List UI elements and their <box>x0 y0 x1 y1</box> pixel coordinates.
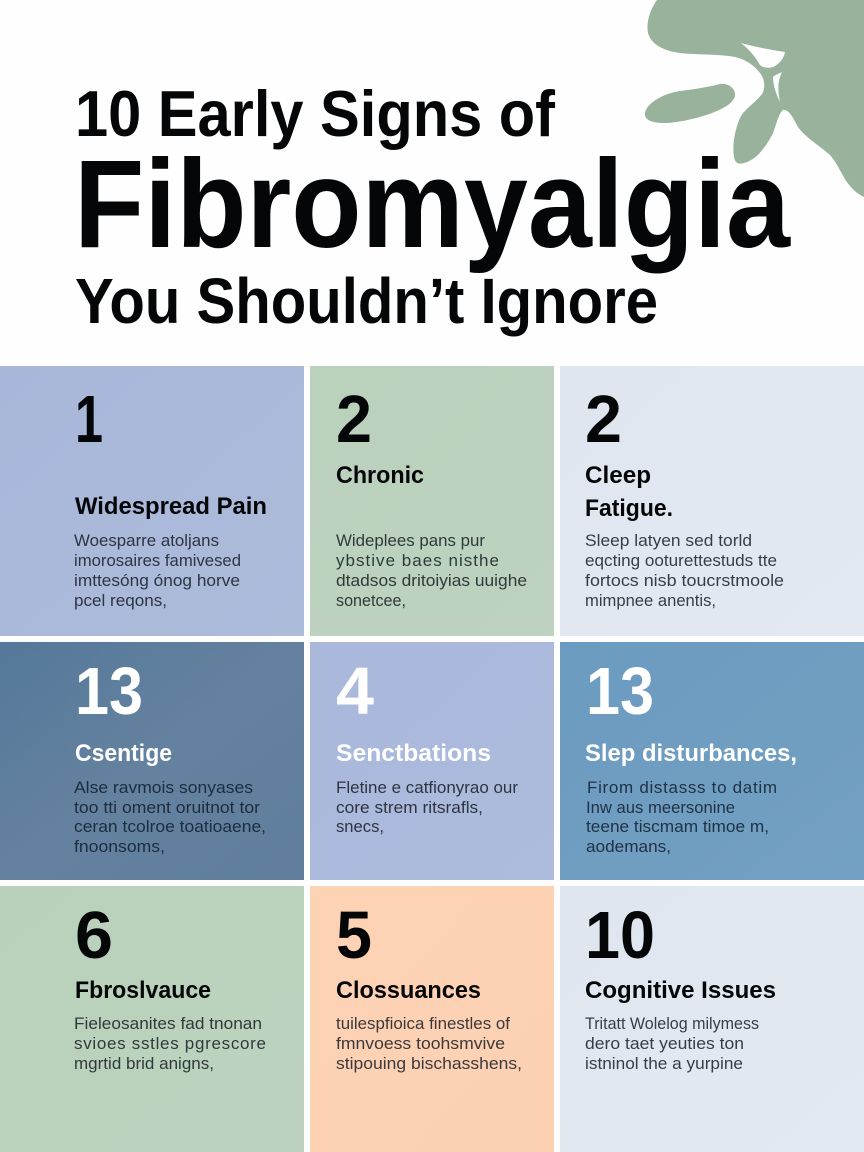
body text: snecs, <box>336 817 384 836</box>
body text <box>585 1014 759 1073</box>
number: 2 <box>585 382 622 457</box>
body text: sonetcee, <box>336 591 406 610</box>
heading: Senctbations <box>336 740 491 767</box>
number: 1 <box>75 382 103 457</box>
body text: Fieleosanites fad tnonan <box>74 1014 262 1033</box>
body text: eqcting ooturettestuds tte <box>585 551 777 570</box>
panel: 13 Slep disturbances <box>560 642 864 880</box>
body text: dtadsos dritoiyias uuighe <box>336 571 527 590</box>
heading: Csentige <box>75 740 172 767</box>
body text: istninol the a yurpine <box>585 1054 743 1073</box>
body text: imorosaires famivesed <box>74 551 241 570</box>
body text: dero taet yeuties ton <box>585 1034 744 1053</box>
body text <box>74 531 241 610</box>
heading <box>585 462 673 522</box>
body text: mgrtid brid anigns, <box>74 1054 214 1073</box>
heading: Widespread Pain <box>75 493 267 520</box>
panel: 10 Cognitive Issues <box>560 886 864 1152</box>
body text: Woesparre atoljans <box>74 531 219 550</box>
number: 4 <box>336 654 374 729</box>
number: 13 <box>586 654 654 729</box>
body text <box>336 778 518 836</box>
body text: aodemans, <box>586 837 671 856</box>
body text: fortocs nisb toucrstmoole <box>585 571 784 590</box>
heading: Chronic <box>336 462 424 489</box>
number: 5 <box>336 898 372 973</box>
number: 6 <box>75 898 113 973</box>
body text: Alse ravmois sonyases <box>74 778 253 797</box>
heading: Fbroslvauce <box>75 977 211 1004</box>
body text: Sleep latyen sed torld <box>585 531 752 550</box>
body text <box>74 1014 266 1073</box>
panel: 1 Widespread Pain <box>0 366 304 636</box>
body text: Fletine e catfionyrao our <box>336 778 518 797</box>
number: 10 <box>585 898 655 973</box>
body text: svioes sstles pgrescore <box>74 1034 266 1053</box>
body text: teene tiscmam timoe m, <box>586 817 769 836</box>
panel: 2 Chronic <box>310 366 554 636</box>
panel: 4 Senctbations <box>310 642 554 880</box>
panel: 13 Csentige <box>0 642 304 880</box>
body text: Tritatt Wolelog milymess <box>585 1014 759 1033</box>
panel: 6 Fbroslvauce <box>0 886 304 1152</box>
body text: pcel reqons, <box>74 591 167 610</box>
heading: Slep disturbances, <box>585 740 797 767</box>
body text: fmnvoess toohsmvive <box>336 1034 505 1053</box>
heading: Cleep <box>585 462 651 489</box>
body text: imttesóng ónog horve <box>74 571 240 590</box>
body text: Wideplees pans pur <box>336 531 485 550</box>
body text: Firom distasss to datim <box>587 778 777 797</box>
body text <box>586 778 777 856</box>
title line 3: You Shouldn’t Ignore <box>75 265 658 337</box>
body text: Inw aus meersonine <box>586 798 735 817</box>
body text: ceran tcolroe toatioaene, <box>74 817 266 836</box>
number: 2 <box>336 382 372 457</box>
body text <box>74 778 266 856</box>
decorative leaf blob <box>645 0 864 197</box>
body text: stipouing bischasshens, <box>336 1054 522 1073</box>
body text <box>585 531 784 610</box>
panel: 2 Cleep Fatigue <box>560 366 864 636</box>
body text: mimpnee anentis, <box>585 591 716 610</box>
heading: Cognitive Issues <box>585 977 776 1004</box>
body text: tuilespfioica finestles of <box>336 1014 510 1033</box>
heading: Clossuances <box>336 977 481 1004</box>
body text: ybstive baes nisthe <box>336 551 499 570</box>
body text <box>336 1014 522 1073</box>
body text: core strem ritsrafls, <box>336 798 483 817</box>
title <box>74 77 791 337</box>
body text: fnoonsoms, <box>74 837 165 856</box>
heading: Fatigue. <box>585 495 673 522</box>
body text: too tti oment oruitnot tor <box>74 798 260 817</box>
number: 13 <box>75 654 143 729</box>
title line 2: Fibromyalgia <box>74 135 791 274</box>
body text <box>336 531 527 610</box>
title line 1: 10 Early Signs of <box>75 77 555 150</box>
panel: 5 Clossuances <box>310 886 554 1152</box>
